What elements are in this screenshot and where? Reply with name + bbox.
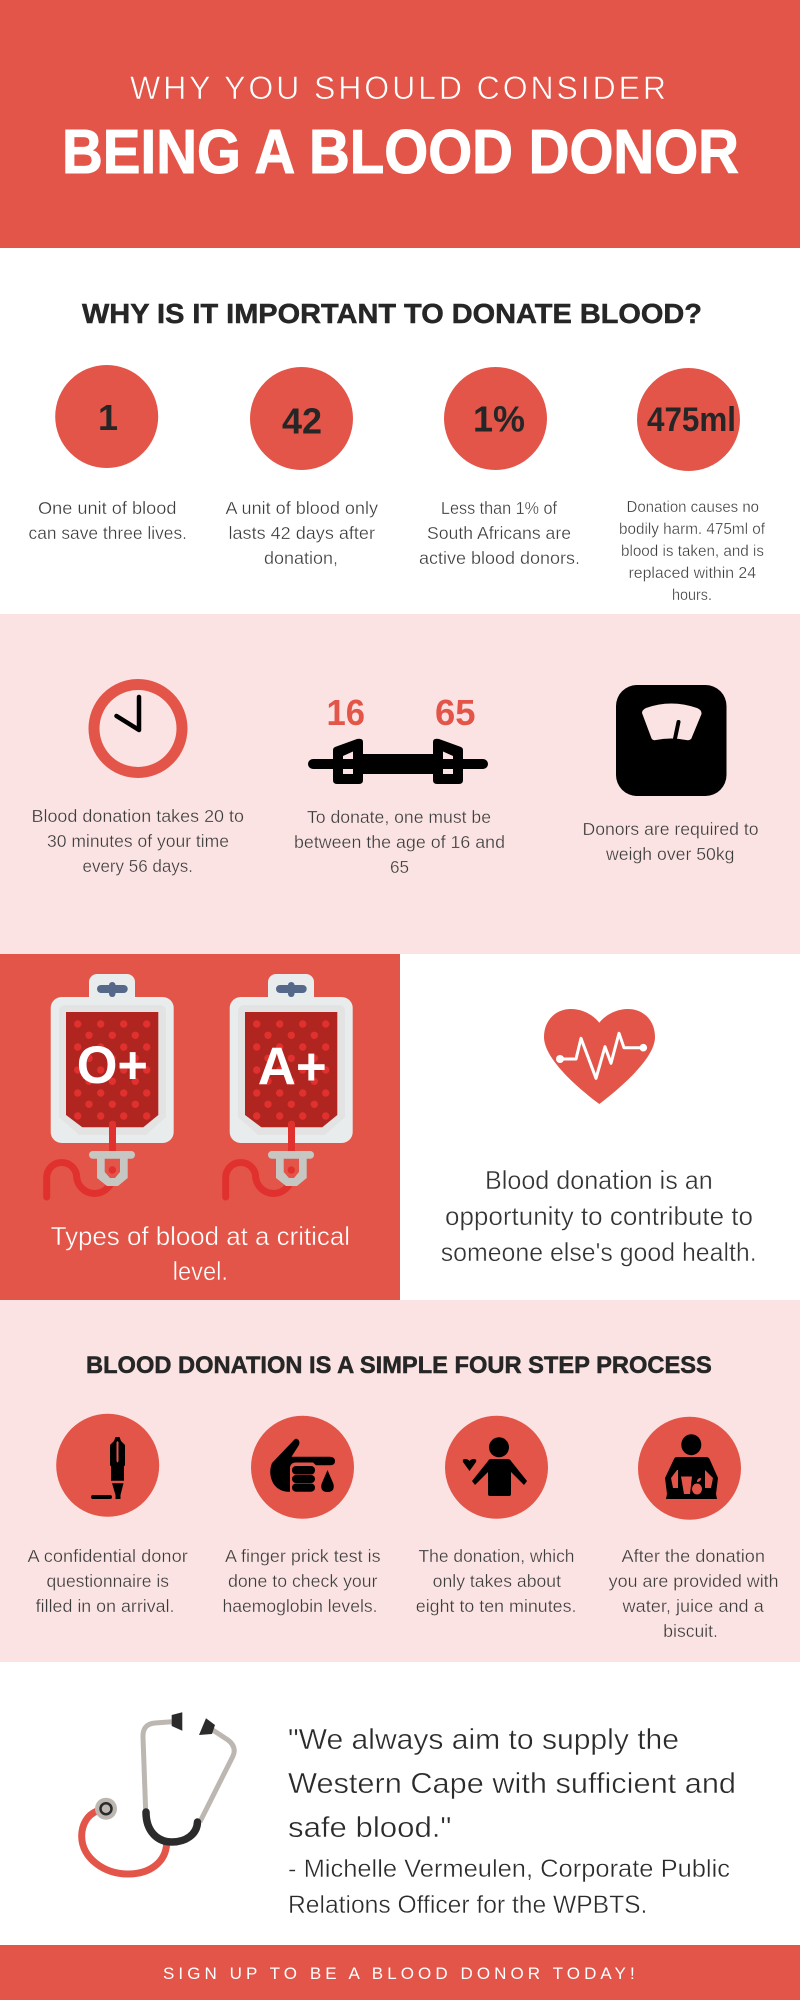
stat: 42 days: 42 <box>282 400 322 442</box>
step 1: questionnaire <box>28 1414 188 1616</box>
icon: heart with pulse <box>544 1009 655 1104</box>
stat: one unit: One unit of blood <box>38 498 176 518</box>
stat: 1 percent: active blood donors. <box>419 548 580 568</box>
text: time commitment: 30 minutes of your time <box>47 831 229 851</box>
panel: donor requirements <box>0 614 800 954</box>
icon: clock <box>94 684 182 772</box>
text: step 2: done to check your <box>228 1571 378 1591</box>
text: step 2: A finger prick test is <box>225 1546 381 1566</box>
text: step 3 <box>416 1546 576 1616</box>
panel: good health <box>400 954 800 1300</box>
text: step 3: The donation, which <box>418 1546 574 1566</box>
stat: 1 percent <box>419 367 580 568</box>
panel: four step process <box>0 1300 800 1662</box>
stat: 475ml: hours. <box>672 587 712 604</box>
stat: one unit <box>28 365 187 543</box>
stat: 475ml: blood is taken, and is <box>621 543 764 560</box>
stat: 42 days <box>226 367 378 568</box>
text: step 4: biscuit. <box>663 1621 718 1641</box>
text: age range: To donate, one must be <box>307 807 491 827</box>
heading: four step process: BLOOD DONATION IS A SIMPLE FOUR STEP PROCESS <box>86 1352 712 1379</box>
stat: 475ml: 475ml <box>647 401 736 439</box>
text: step 1: A confidential donor <box>28 1546 188 1566</box>
quote attribution: Relations Officer for the WPBTS. <box>288 1891 647 1919</box>
stat: 1 percent: 1% <box>473 398 525 440</box>
title line: why you should consider: WHY YOU SHOULD CONSIDER <box>130 70 666 106</box>
panel: why donate <box>0 248 800 614</box>
text: step 1 <box>28 1546 188 1616</box>
title line: being a blood donor: BEING A BLOOD DONOR <box>62 118 739 187</box>
icon: dumbbell <box>308 739 488 784</box>
text: step 4 <box>609 1546 779 1641</box>
text: step 4: water, juice and a <box>621 1596 764 1616</box>
stat: one unit: 1 <box>98 397 118 438</box>
text: step 2: haemoglobin levels. <box>222 1596 378 1616</box>
age numbers: 65 <box>435 692 476 733</box>
footer banner <box>0 1945 800 2000</box>
stat: 475ml: Donation causes no <box>626 499 759 516</box>
text: age range: 65 <box>390 857 409 877</box>
text: critical blood types: level. <box>173 1256 228 1286</box>
icon: O+ blood bag: O+ <box>77 1036 148 1095</box>
step 3: donation <box>416 1416 576 1616</box>
stat: 475ml: replaced within 24 <box>628 565 756 582</box>
quote attribution <box>288 1855 730 1919</box>
heading: why is it important: WHY IS IT IMPORTANT TO DONATE BLOOD? <box>82 298 702 329</box>
quote text: Western Cape with sufficient and <box>288 1768 736 1800</box>
text: step 2 <box>222 1546 381 1616</box>
icon: A+ blood bag: A+ <box>258 1038 327 1096</box>
icon: person with heart <box>463 1437 527 1496</box>
text: weight requirement <box>582 819 758 864</box>
icon: stethoscope <box>82 1712 234 1874</box>
icon: O+ blood bag <box>47 974 174 1197</box>
text: good health statement: Blood donation is an <box>485 1165 713 1195</box>
text: step 1: questionnaire is <box>46 1571 169 1591</box>
text: weight requirement: Donors are required to <box>582 819 758 839</box>
stat: 42 days: A unit of blood only <box>226 498 378 518</box>
quote text <box>288 1724 736 1844</box>
panel: blood types <box>0 954 400 1300</box>
text: time commitment <box>32 806 244 876</box>
quote attribution: - Michelle Vermeulen, Corporate Public <box>288 1855 730 1883</box>
text: time commitment: Blood donation takes 20 to <box>32 806 244 826</box>
stat: 475ml: bodily harm. 475ml of <box>619 521 766 538</box>
stat: 1 percent: Less than 1% of <box>441 498 557 518</box>
stat: one unit: can save three lives. <box>28 523 187 543</box>
text: step 4: After the donation <box>622 1546 765 1566</box>
step 4: refreshments <box>609 1417 779 1641</box>
text: age range <box>294 807 505 877</box>
text: critical blood types: Types of blood at a critical <box>51 1221 350 1251</box>
icon: pen <box>91 1437 125 1499</box>
text: critical blood types <box>51 1221 350 1286</box>
quote text: "We always aim to supply the <box>288 1724 679 1756</box>
icon: finger prick hand <box>270 1439 335 1492</box>
text: age range: between the age of 16 and <box>294 832 505 852</box>
age numbers: 16 <box>326 692 365 733</box>
text: step 1: filled in on arrival. <box>36 1596 175 1616</box>
quote text: safe blood." <box>288 1812 452 1844</box>
stat: 42 days: donation, <box>264 548 338 568</box>
text: good health statement: someone else's good health. <box>441 1237 757 1267</box>
text: step 4: you are provided with <box>609 1571 779 1591</box>
text: time commitment: every 56 days. <box>82 856 193 876</box>
stat: 475ml <box>619 368 766 604</box>
icon: person with snack <box>665 1434 718 1499</box>
icon: weighing scale <box>616 685 726 796</box>
footer call to action: SIGN UP TO BE A BLOOD DONOR TODAY! <box>163 1964 635 1983</box>
text: step 3: eight to ten minutes. <box>416 1596 576 1616</box>
stat: 42 days: lasts 42 days after <box>228 523 375 543</box>
text: step 3: only takes about <box>433 1571 561 1591</box>
text: good health statement: opportunity to contribute to <box>445 1201 753 1231</box>
stat: 1 percent: South Africans are <box>427 523 571 543</box>
icon: A+ blood bag <box>226 974 353 1197</box>
header banner <box>0 0 800 248</box>
text: weight requirement: weigh over 50kg <box>605 844 734 864</box>
panel: quote <box>0 1662 800 1945</box>
age numbers <box>326 692 476 733</box>
text: good health statement <box>441 1165 757 1267</box>
step 2: finger prick <box>222 1416 381 1616</box>
